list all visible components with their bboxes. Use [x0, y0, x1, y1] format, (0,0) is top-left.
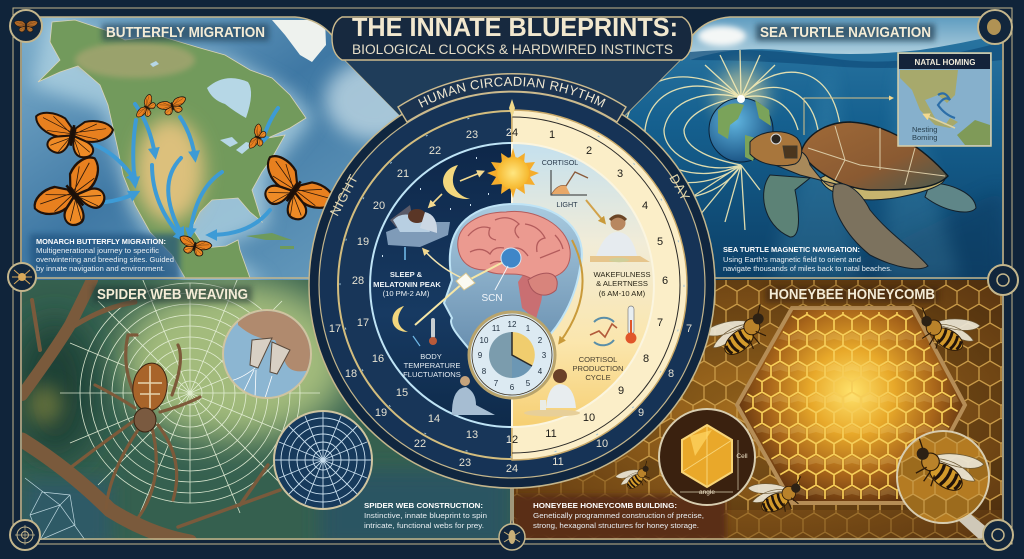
light beam into SCN [415, 258, 511, 325]
cortisol chart [542, 158, 588, 209]
medallion: web target [10, 520, 40, 550]
title: THE INNATE BLUEPRINTS: [352, 14, 678, 42]
text block: spider web construction [364, 501, 487, 530]
hour numbers: day side: 7 [686, 323, 692, 335]
woman eating [524, 369, 580, 416]
night half [370, 143, 512, 427]
hour numbers: night side: 14 [428, 413, 440, 425]
label: sleep and melatonin: SLEEP & [390, 270, 423, 279]
hour numbers: night side: 17 [357, 317, 369, 329]
hour numbers: day side: 11 [545, 428, 557, 440]
label: wakefulness and alertness: & ALERTNESS [596, 279, 648, 288]
heading: honeybee honeycomb: HONEYBEE HONEYCOMB [769, 286, 935, 303]
panel: honeybee honeycomb [514, 280, 1004, 540]
hour numbers: night side: 13 [466, 429, 478, 441]
panel: butterfly migration [22, 17, 425, 282]
hour numbers: night side: 24 [506, 463, 518, 475]
connector to inset [804, 98, 892, 135]
panel: sea turtle navigation [600, 17, 1010, 282]
inset: natal homing map: NATAL HOMING [915, 58, 975, 67]
SCN pointer [495, 266, 508, 290]
clock: 10 [480, 336, 489, 345]
day half [512, 143, 654, 427]
text block: honeycomb building: Genetically programmed construction of precise, [533, 511, 704, 520]
hour numbers: night side: 21 [397, 168, 409, 180]
hour numbers: day side: 8 [643, 353, 649, 365]
label: wakefulness and alertness [593, 270, 651, 298]
text block: spider web construction: intricate, functional webs for prey. [364, 521, 484, 530]
hour 24 and 12 [506, 127, 518, 446]
clock: 2 [538, 336, 543, 345]
polar glow [715, 68, 767, 124]
heading: sea turtle navigation: SEA TURTLE NAVIGATION [760, 24, 931, 41]
medallion: honeycomb [983, 520, 1013, 550]
label: cortisol production cycle: PRODUCTION [572, 364, 624, 373]
hour numbers: day side [545, 129, 692, 468]
inset: natal homing map: Nesting [912, 125, 937, 134]
panel: spider web weaving [15, 273, 512, 550]
inset: spinneret closeup [223, 310, 311, 398]
label: wakefulness and alertness: WAKEFULNESS [593, 270, 651, 279]
clock: 12 [508, 320, 517, 329]
monarch butterflies [30, 93, 338, 259]
person sitting in bed [452, 376, 495, 415]
stars [382, 158, 489, 256]
label: night: NIGHT [327, 171, 361, 218]
clock: 11 [492, 324, 501, 333]
label: body temperature [403, 352, 461, 379]
cortisol chart: CORTISOL [542, 158, 578, 167]
text block: honeycomb building: HONEYBEE HONEYCOMB BUILDING: [533, 501, 677, 510]
hour numbers: day side: 7 [657, 317, 663, 329]
inset: hexagon cell geometry: Cell [736, 453, 748, 460]
magnetic field lines [625, 50, 840, 230]
hour numbers: day side: 11 [552, 456, 564, 468]
banner: human circadian rhythm [397, 73, 627, 123]
hour numbers: night side: 15 [396, 387, 408, 399]
text block: monarch migration: overwintering and breeding sites. Guided [36, 255, 174, 264]
arrow: body temperature [413, 336, 420, 346]
label: body temperature: BODY [420, 352, 442, 361]
sky strip above water [690, 17, 1002, 60]
hour numbers: night side: 19 [375, 407, 387, 419]
clock: 4 [538, 367, 543, 376]
label: day: DAY [666, 172, 693, 204]
heading backdrop: honeybee [765, 286, 939, 303]
hour numbers: night side: 19 [357, 236, 369, 248]
text block: magnetic navigation: SEA TURTLE MAGNETIC NAVIGATION: [723, 245, 860, 254]
inset: web diagram [274, 411, 372, 509]
hour numbers: night side: 18 [345, 368, 357, 380]
hour numbers: night side: 20 [373, 200, 385, 212]
hour numbers: day side: 5 [657, 236, 663, 248]
arrow: moon to bed [430, 194, 442, 206]
migration arrows [95, 104, 278, 238]
earth globe [709, 95, 773, 162]
hour numbers: night side: 28 [352, 275, 364, 287]
forest bokeh background [15, 280, 510, 550]
arrow: eye to sleep [424, 250, 462, 278]
clock: 6 [510, 383, 515, 392]
text block: spider web construction: Instinctive, innate blueprint to spin [364, 511, 487, 520]
orb web [60, 273, 320, 513]
label: sleep and melatonin [373, 270, 441, 298]
map: hudson bay [207, 78, 251, 118]
map: north america landmass [38, 20, 326, 278]
icon: sun [487, 148, 539, 198]
medallion: butterfly [10, 10, 42, 42]
text block: monarch migration: Multigenerational journey to specific [36, 246, 159, 255]
label: SCN: SCN [481, 293, 503, 304]
clock: 5 [526, 379, 531, 388]
hour numbers: night side: 23 [466, 129, 478, 141]
cortisol chart: LIGHT [556, 200, 578, 209]
hour numbers: day side: 10 [596, 438, 608, 450]
map: greenland [272, 20, 326, 62]
inset: hexagon cell geometry [659, 409, 755, 505]
icon: thermometer warm [626, 306, 636, 344]
hour numbers: night side: 17 [329, 323, 341, 335]
label: sleep and melatonin: MELATONIN PEAK [373, 280, 441, 289]
sea turtle [750, 122, 976, 269]
text block: magnetic navigation [723, 245, 892, 273]
central hexagon honeycomb [737, 308, 965, 503]
label: wakefulness and alertness: (6 AM-10 AM) [599, 289, 646, 298]
panel shading under the caption [30, 234, 180, 280]
inset: hexagon cell geometry: angle [699, 489, 715, 496]
icon: thermometer night [429, 318, 437, 345]
inset: natal homing map: Boming [912, 133, 937, 142]
hour numbers: night side: 22 [414, 438, 426, 450]
text block: monarch migration: by innate navigation and environment. [36, 264, 165, 273]
arrow: light to wakefulness [586, 200, 604, 222]
hour numbers: day side: 1 [549, 129, 555, 141]
label: cortisol production cycle: CORTISOL [579, 355, 617, 364]
hour numbers: day side: 10 [583, 412, 595, 424]
medallion: atom [988, 265, 1018, 295]
hour numbers: night side [329, 129, 518, 475]
subtitle: BIOLOGICAL CLOCKS & HARDWIRED INSTINCTS [352, 42, 673, 57]
inset: magnifier with bee [896, 430, 990, 540]
awake person at table [590, 216, 650, 262]
bees [615, 293, 982, 523]
clock: 8 [482, 367, 487, 376]
tree branches [22, 280, 280, 542]
hour numbers: night side: 23 [459, 457, 471, 469]
text block: spider web construction: SPIDER WEB CONSTRUCTION: [364, 501, 483, 510]
cortisol cycle icon [590, 318, 617, 345]
noon marker diamond [509, 99, 515, 118]
clock: 3 [542, 351, 547, 360]
label: body temperature: TEMPERATURE [404, 361, 460, 370]
heading backdrop: turtle [756, 24, 935, 41]
hour 24 and 12: 24 [506, 127, 518, 139]
sky haze near the top right of the map [325, 60, 425, 140]
hour numbers: night side: 16 [372, 353, 384, 365]
head silhouette [444, 204, 582, 372]
label: cortisol production cycle [572, 355, 624, 382]
banner: human circadian rhythm: HUMAN CIRCADIAN RHYTHM [418, 76, 606, 108]
circadian dial [309, 82, 715, 488]
hour numbers: day side: 3 [617, 168, 623, 180]
hour 24 and 12: 12 [506, 434, 518, 446]
heading: spider web weaving: SPIDER WEB WEAVING [97, 286, 248, 303]
hour numbers: day side: 2 [586, 145, 592, 157]
coastal glow [38, 22, 306, 278]
heading backdrop: butterfly [102, 24, 269, 41]
label: sleep and melatonin: (10 PM-2 AM) [383, 289, 430, 298]
medallion: bee [499, 524, 525, 550]
text block: magnetic navigation: Using Earth's magnetic field to orient and [723, 255, 861, 264]
orb weaver spider [70, 335, 200, 518]
label: body temperature: FLUCTUATIONS [403, 370, 461, 379]
sleeping person in bed [386, 205, 450, 247]
hour numbers: day side: 8 [668, 368, 674, 380]
icon: crescent moon [443, 165, 470, 199]
crescent moon small [392, 306, 408, 332]
light rays [772, 92, 958, 280]
clock: 1 [526, 324, 531, 333]
heading backdrop: spider [93, 286, 252, 303]
SCN marker [501, 248, 521, 268]
arrow: bed to sleep label [404, 247, 406, 260]
medallion: spider [8, 263, 36, 291]
brain [458, 211, 570, 320]
arrow: moon to sun [460, 172, 482, 181]
map: caribbean islands [246, 233, 294, 249]
text block: honeycomb building [533, 501, 704, 530]
hour numbers: day side: 9 [638, 407, 644, 419]
clock [469, 312, 555, 398]
hour numbers: day side: 4 [642, 200, 648, 212]
water surface and deep shading [690, 42, 1002, 68]
label: cortisol production cycle: CYCLE [585, 373, 611, 382]
title backdrop triangle [345, 60, 680, 128]
small corner web [25, 478, 85, 540]
text block: monarch migration [36, 237, 174, 273]
map: central dry plains [136, 118, 204, 222]
hour numbers: night side: 22 [429, 145, 441, 157]
icon: eye [456, 273, 475, 290]
title banner [332, 14, 692, 60]
text block: honeycomb building: strong, hexagonal structures for honey storage. [533, 521, 699, 530]
clock: 7 [494, 379, 499, 388]
hour numbers: day side: 9 [618, 385, 624, 397]
medallion: turtle [978, 10, 1012, 44]
clock: 9 [478, 351, 483, 360]
inset: natal homing map [898, 53, 991, 146]
hour numbers: day side: 6 [662, 275, 668, 287]
text block: magnetic navigation: navigate thousands of miles back to natal beaches. [723, 264, 892, 273]
text block: monarch migration: MONARCH BUTTERFLY MIGRATION: [36, 237, 166, 246]
arrow: rim to clock [560, 240, 583, 342]
heading: butterfly migration: BUTTERFLY MIGRATION [106, 24, 265, 41]
